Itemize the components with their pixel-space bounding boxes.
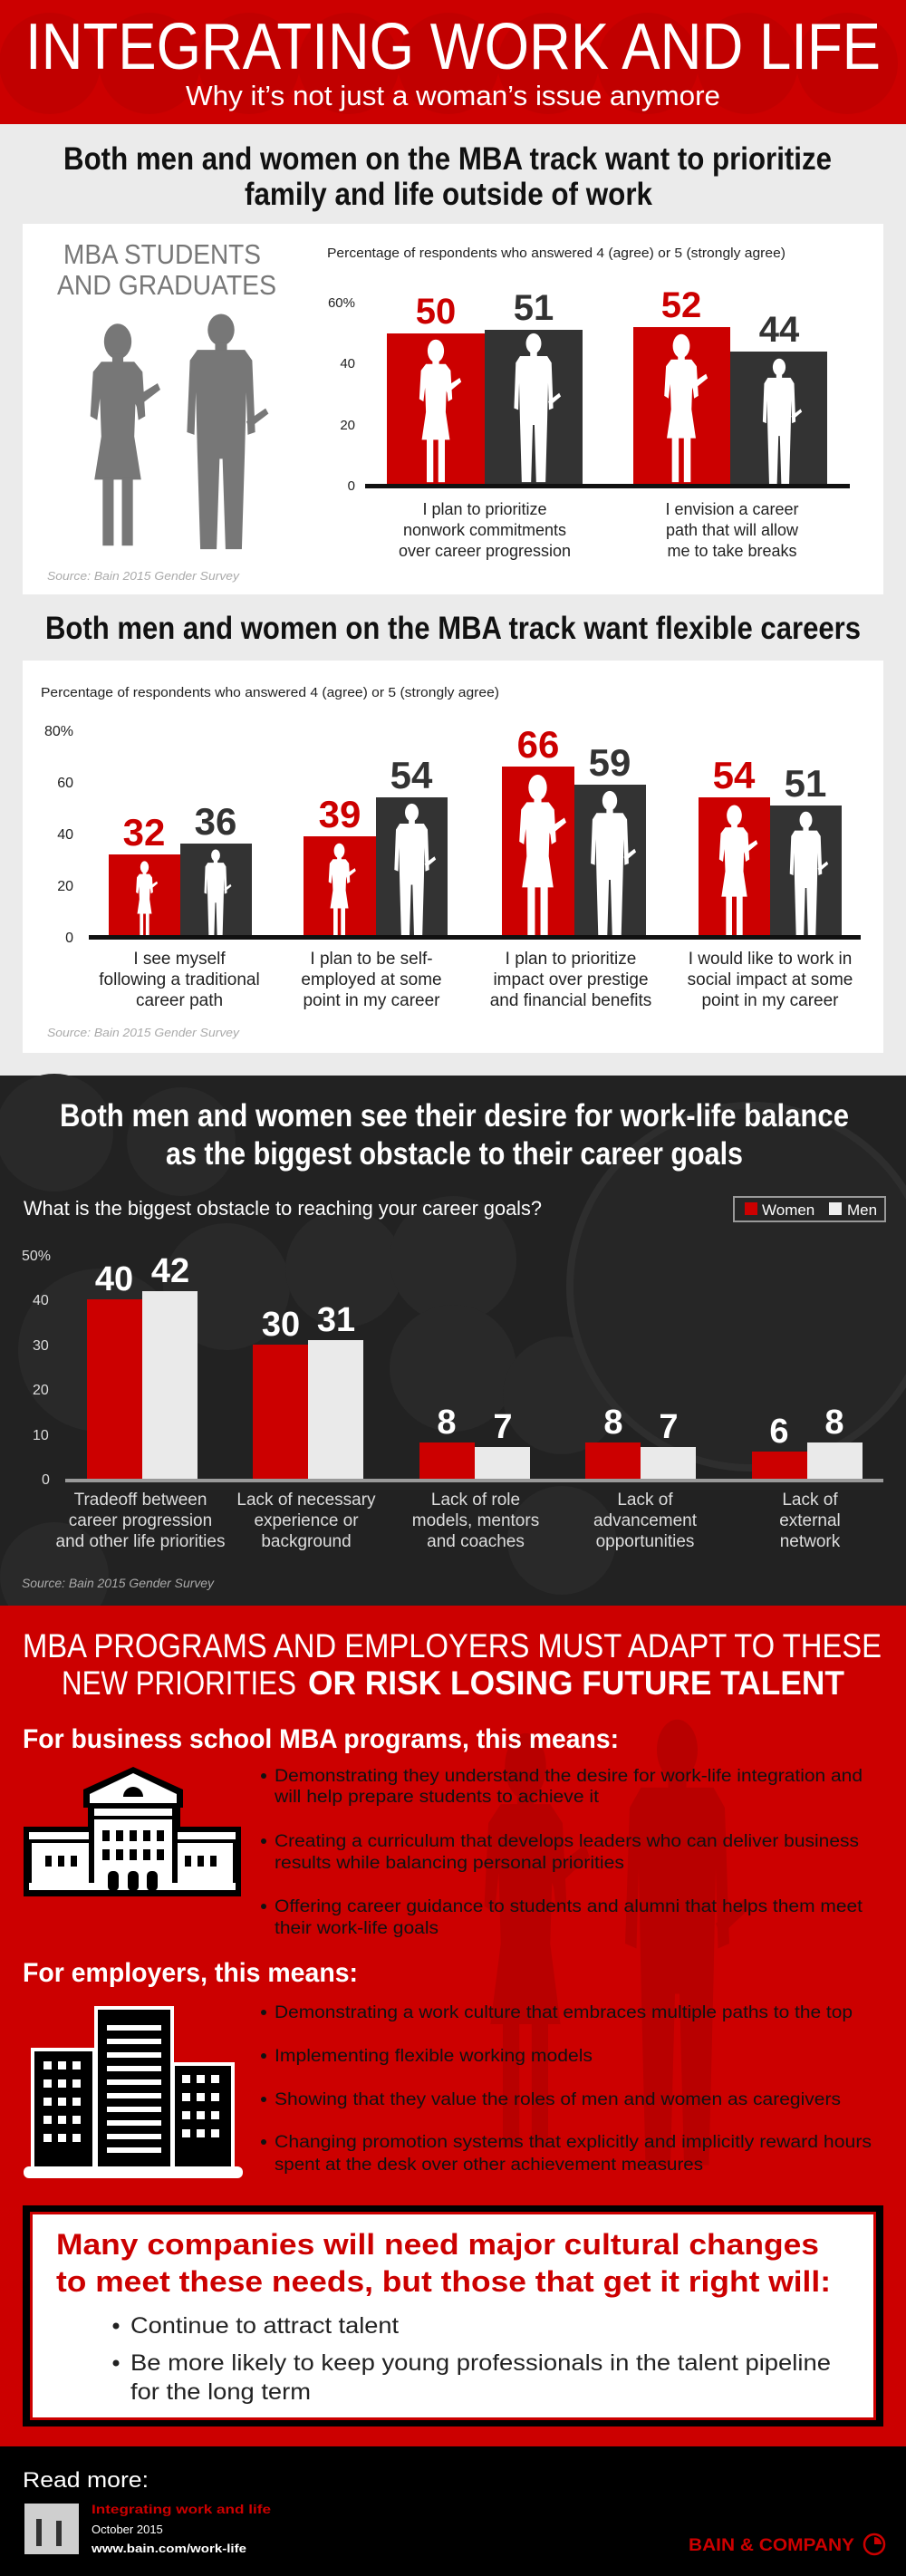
header banner <box>0 0 906 124</box>
icon: gray silhouettes <box>91 314 268 549</box>
bar chart 2: I would like to work in <box>689 950 852 969</box>
bar chart 3: 42 <box>151 1252 189 1290</box>
section title: OR RISK LOSING FUTURE TALENT <box>308 1664 844 1702</box>
bar chart 1: 44 <box>759 310 800 350</box>
bar chart 1: me to take breaks <box>667 542 797 560</box>
bar chart 3: 8 <box>603 1404 623 1442</box>
bullets: business school <box>261 1767 863 1938</box>
business school subheading: For business school MBA programs, this means: <box>23 1724 619 1754</box>
bullets: employers: Implementing flexible working models <box>275 2047 593 2066</box>
bar chart 2 <box>89 723 861 1010</box>
panel: chart 2: 0 <box>65 931 73 946</box>
bar chart 1: 51 <box>514 288 554 328</box>
y axis: 0 <box>42 1472 50 1488</box>
question: What is the biggest obstacle to reaching your career goals? <box>24 1197 542 1220</box>
bar chart 2: 51 <box>785 762 826 805</box>
bar chart 2: social impact at some <box>688 970 853 989</box>
bar chart 2: following a traditional <box>99 970 260 989</box>
y axis: 30 <box>33 1338 49 1354</box>
legend: Men <box>847 1201 877 1219</box>
bar chart 2: 54 <box>713 754 756 796</box>
y axis: 0 <box>348 478 355 494</box>
panel: chart 2: Percentage of respondents who answered 4 (agree) or 5 (strongly agree) <box>41 685 499 700</box>
panel: chart 1 <box>23 224 883 594</box>
bar chart 2: and financial benefits <box>490 991 651 1010</box>
callout box: Be more likely to keep young professionals in the talent pipeline <box>130 2350 831 2376</box>
y axis: 20 <box>340 418 355 433</box>
bar chart 2: I see myself <box>133 950 226 969</box>
label: MBA students: MBA STUDENTS <box>63 238 261 270</box>
panel: dark obstacle section <box>0 1074 906 1631</box>
bar chart 3: 7 <box>493 1408 513 1446</box>
bullets: business school: Creating a curriculum that develops leaders who can deliver business <box>275 1832 859 1851</box>
callout box <box>23 2205 883 2426</box>
bar chart 3: 8 <box>824 1404 844 1442</box>
bar chart 3: advancement <box>593 1511 698 1530</box>
bar chart 3: career progression <box>69 1511 212 1530</box>
bullets: business school: will help prepare students to achieve it <box>274 1788 600 1807</box>
label: MBA students <box>57 238 276 301</box>
bar chart 3: 7 <box>659 1408 679 1446</box>
bar chart 3: 6 <box>769 1413 789 1451</box>
bullets: employers: spent at the desk over other achievement measures <box>275 2156 703 2175</box>
section title: NEW PRIORITIES <box>62 1664 296 1702</box>
logo: Bain & Company: BAIN & COMPANY <box>689 2536 854 2555</box>
bar chart 2: career path <box>136 991 223 1010</box>
bar chart 2: point in my career <box>303 991 440 1010</box>
y axis: 40 <box>340 356 355 371</box>
bar chart 1: nonwork commitments <box>403 521 566 539</box>
y axis <box>22 1249 51 1488</box>
bar chart 3: and other life priorities <box>56 1532 225 1551</box>
panel: chart 2: 40 <box>57 827 73 843</box>
panel: red recommendations section <box>0 1606 906 2446</box>
y axis <box>328 295 355 494</box>
employers subheading: For employers, this means: <box>23 1958 358 1988</box>
bullets: business school: their work-life goals <box>275 1919 439 1938</box>
bullets: employers: Showing that they value the roles of men and women as caregivers <box>275 2090 841 2109</box>
bar chart 3: external <box>779 1511 841 1530</box>
label: MBA students: AND GRADUATES <box>57 269 276 301</box>
icon: office buildings <box>24 2008 243 2178</box>
bar chart 2: 54 <box>390 754 433 796</box>
bar chart 2: I plan to be self- <box>310 950 433 969</box>
bullets: employers: Demonstrating a work culture that embraces multiple paths to the top <box>275 2003 853 2022</box>
y axis: 50% <box>22 1249 51 1264</box>
bar chart 3: experience or <box>254 1511 359 1530</box>
section background gray <box>0 124 906 1076</box>
bar chart 1: I plan to prioritize <box>422 500 547 518</box>
bullets: employers: Changing promotion systems that explicitly and implicitly reward hours <box>275 2133 872 2152</box>
bar chart 2: 39 <box>319 793 361 835</box>
thumbnail <box>24 2504 79 2554</box>
panel: chart 2: 20 <box>57 879 73 894</box>
y axis: 20 <box>33 1383 49 1398</box>
subtitle: Why it’s not just a woman’s issue anymore <box>186 80 720 111</box>
panel: chart 2: 80% <box>44 724 73 739</box>
callout box: Many companies will need major cultural changes <box>56 2228 819 2261</box>
bar chart 3: models, mentors <box>412 1511 539 1530</box>
bar chart 3: Lack of <box>782 1491 838 1510</box>
bar chart 2: I plan to prioritize <box>506 950 636 969</box>
bar chart 1: 50 <box>416 292 456 332</box>
bar chart 1: I envision a career <box>665 500 799 518</box>
bar chart 2: impact over prestige <box>493 970 649 989</box>
bar chart 3: 30 <box>262 1306 300 1344</box>
footer: Integrating work and life <box>92 2502 271 2516</box>
bar chart 3: Lack of necessary <box>236 1491 376 1510</box>
panel: chart 2: Source: Bain 2015 Gender Survey <box>47 1026 241 1039</box>
bar chart 1: over career progression <box>399 542 571 560</box>
heading 1: family and life outside of work <box>245 177 652 212</box>
bullets: employers <box>261 2003 872 2175</box>
bar chart 3: 40 <box>95 1260 133 1298</box>
bar chart 3: and coaches <box>427 1532 525 1551</box>
bar chart 2: employed at some <box>301 970 442 989</box>
heading 3 <box>60 1098 849 1172</box>
bar chart 3: 31 <box>317 1301 355 1339</box>
bar chart 3: Lack of role <box>431 1491 520 1510</box>
bar chart 1: path that will allow <box>666 521 799 539</box>
source: Source: Bain 2015 Gender Survey <box>47 569 241 583</box>
bar chart 3: Tradeoff between <box>74 1491 207 1510</box>
footer: October 2015 <box>92 2523 163 2536</box>
callout box: Continue to attract talent <box>130 2313 399 2339</box>
bar chart 1 <box>365 285 850 560</box>
bullets: business school: results while balancing personal priorities <box>275 1854 624 1873</box>
legend: Women <box>762 1201 814 1219</box>
icon: university building <box>24 1767 241 1896</box>
panel: chart 2 <box>23 661 883 1053</box>
legend <box>734 1197 885 1221</box>
bullets: business school: Demonstrating they understand the desire for work-life integration and <box>275 1767 863 1786</box>
callout box: for the long term <box>130 2379 311 2405</box>
bar chart 3: network <box>780 1532 841 1551</box>
y axis: 60% <box>328 295 355 311</box>
footer: www.bain.com/work-life <box>91 2542 246 2555</box>
bar chart 2: 32 <box>123 811 165 854</box>
heading 1: Both men and women on the MBA track want to prioritize <box>63 141 832 177</box>
bullets: business school: Offering career guidance to students and alumni that helps them meet <box>275 1897 863 1916</box>
bar chart 2: 59 <box>589 741 631 784</box>
bar chart 2: 36 <box>195 800 236 843</box>
chart subtitle: Percentage of respondents who answered 4 (agree) or 5 (strongly agree) <box>327 246 786 261</box>
footer: Read more: <box>23 2468 149 2493</box>
bar chart 3 <box>56 1252 883 1551</box>
section title <box>23 1627 882 1702</box>
panel: dark obstacle section: Source: Bain 2015 Gender Survey <box>22 1576 215 1590</box>
footer <box>0 2446 906 2576</box>
bar chart 3: background <box>261 1532 352 1551</box>
bar chart 3: Lack of <box>617 1491 673 1510</box>
bar chart 2: 66 <box>517 723 559 766</box>
y axis: 40 <box>33 1293 49 1308</box>
heading 3: as the biggest obstacle to their career goals <box>166 1136 743 1172</box>
panel: chart 2: 60 <box>57 776 73 791</box>
callout box: to meet these needs, but those that get it right will: <box>56 2265 831 2298</box>
y axis: 10 <box>33 1428 49 1443</box>
bar chart 3: opportunities <box>596 1532 694 1551</box>
heading 1 <box>63 141 832 212</box>
bar chart 1: 52 <box>661 285 701 325</box>
bar chart 3: 8 <box>437 1404 457 1442</box>
bar chart 2: point in my career <box>701 991 839 1010</box>
